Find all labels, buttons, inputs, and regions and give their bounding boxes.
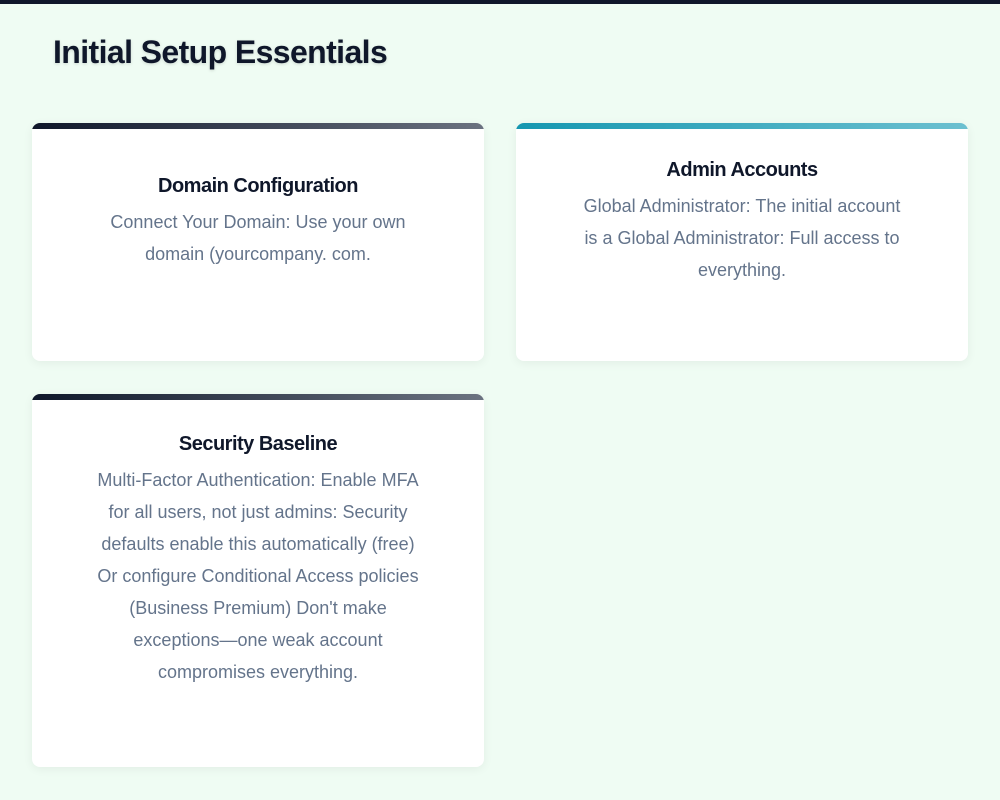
panel: domain configuration [32, 123, 484, 361]
text: security baseline: Multi-Factor Authentication: Enable MFA for all users, not just admins: Security defaults enable this automatically (free) Or configure Conditional Access policies (Business Premium) Don't make exceptions—one weak account compromises everything. [97, 470, 419, 682]
text: domain configuration: Connect Your Domain: Use your own domain (yourcompany. com. [110, 212, 406, 264]
title: Initial Setup Essentials [53, 34, 387, 70]
text: domain configuration [110, 175, 406, 264]
text: admin accounts [584, 159, 900, 280]
text: security baseline: Security Baseline [179, 433, 337, 455]
text: admin accounts: Global Administrator: The initial account is a Global Administrator: Full access to everything. [584, 196, 900, 280]
panel: admin accounts [516, 123, 968, 361]
text: admin accounts: Admin Accounts [666, 159, 818, 181]
text: domain configuration: Domain Configuration [158, 175, 358, 197]
panel: security baseline [32, 394, 484, 767]
